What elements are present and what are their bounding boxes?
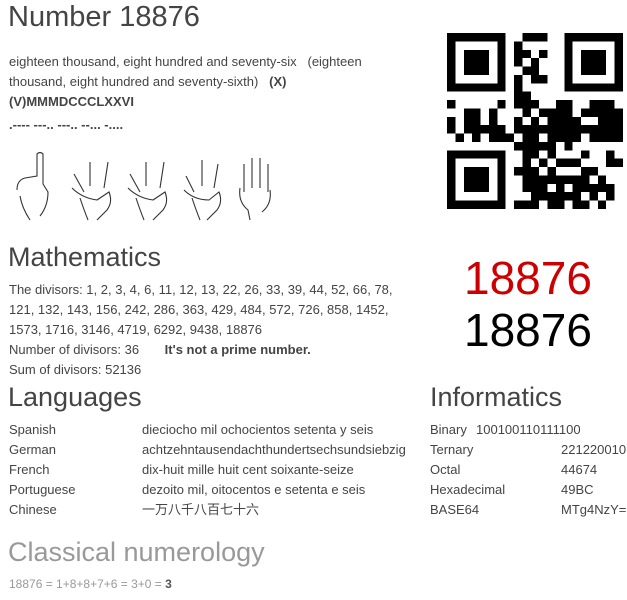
table: informatics: 49BC xyxy=(561,482,594,497)
table: informatics: Hexadecimal xyxy=(430,482,505,497)
text block: names: (V)MMMDCCCLXXVI xyxy=(9,94,134,109)
table: informatics: Binary xyxy=(430,422,467,437)
table: languages: dieciocho mil ochocientos setenta y seis xyxy=(142,422,373,437)
big red number: 18876 xyxy=(464,252,592,304)
QR code xyxy=(447,33,623,209)
heading: Classical numerology: Classical numerology xyxy=(8,537,265,567)
heading: Informatics: Informatics xyxy=(430,382,562,412)
table: languages: Portuguese xyxy=(9,482,76,497)
morse code: .---- ---.. ---.. --... -.... xyxy=(9,117,123,132)
text block: divisors: Number of divisors: 36 It's not a prime number. xyxy=(9,342,311,357)
big black number: 18876 xyxy=(464,304,592,356)
text block: divisors: 1573, 1716, 3146, 4719, 6292, 9438, 18876 xyxy=(9,322,262,337)
text block: names xyxy=(9,54,362,109)
text block: names: thousand, eight hundred and seventy-sixth) (X) xyxy=(9,74,287,89)
table: informatics xyxy=(430,422,626,517)
text block: divisors: Sum of divisors: 52136 xyxy=(9,362,141,377)
text block: divisors: 121, 132, 143, 156, 242, 286, 363, 429, 484, 572, 726, 858, 1452, xyxy=(9,302,388,317)
table: languages: dezoito mil, oitocentos e setenta e seis xyxy=(142,482,365,497)
heading: Mathematics: Mathematics xyxy=(8,242,161,272)
table: languages: French xyxy=(9,462,49,477)
numerology calculation: 18876 = 1+8+8+7+6 = 3+0 = 3 xyxy=(9,577,172,591)
table: informatics: BASE64 xyxy=(430,502,479,517)
table: languages: German xyxy=(9,442,56,457)
table: languages: Chinese xyxy=(9,502,57,517)
table: languages: 一万八千八百七十六 xyxy=(142,502,259,517)
table: informatics: Ternary xyxy=(430,442,473,457)
table: informatics: 221220010 xyxy=(561,442,626,457)
heading: Languages: Languages xyxy=(8,382,142,412)
icon: sign language hands xyxy=(16,152,271,220)
text block: names: eighteen thousand, eight hundred and seventy-six (eighteen xyxy=(9,54,362,69)
title: Number 18876 xyxy=(8,1,200,33)
text block: divisors: The divisors: 1, 2, 3, 4, 6, 11, 12, 13, 22, 26, 33, 39, 44, 52, 66, 78, xyxy=(9,282,393,297)
table: languages xyxy=(9,422,406,517)
table: informatics: MTg4NzY= xyxy=(561,502,626,517)
table: languages: Spanish xyxy=(9,422,56,437)
table: informatics: 100100110111100 xyxy=(476,422,581,437)
table: languages: dix-huit mille huit cent soixante-seize xyxy=(142,462,354,477)
table: informatics: 44674 xyxy=(561,462,597,477)
table: informatics: Octal xyxy=(430,462,460,477)
text block: divisors xyxy=(9,282,393,377)
table: languages: achtzehntausendachthundertsechsundsiebzig xyxy=(142,442,406,457)
